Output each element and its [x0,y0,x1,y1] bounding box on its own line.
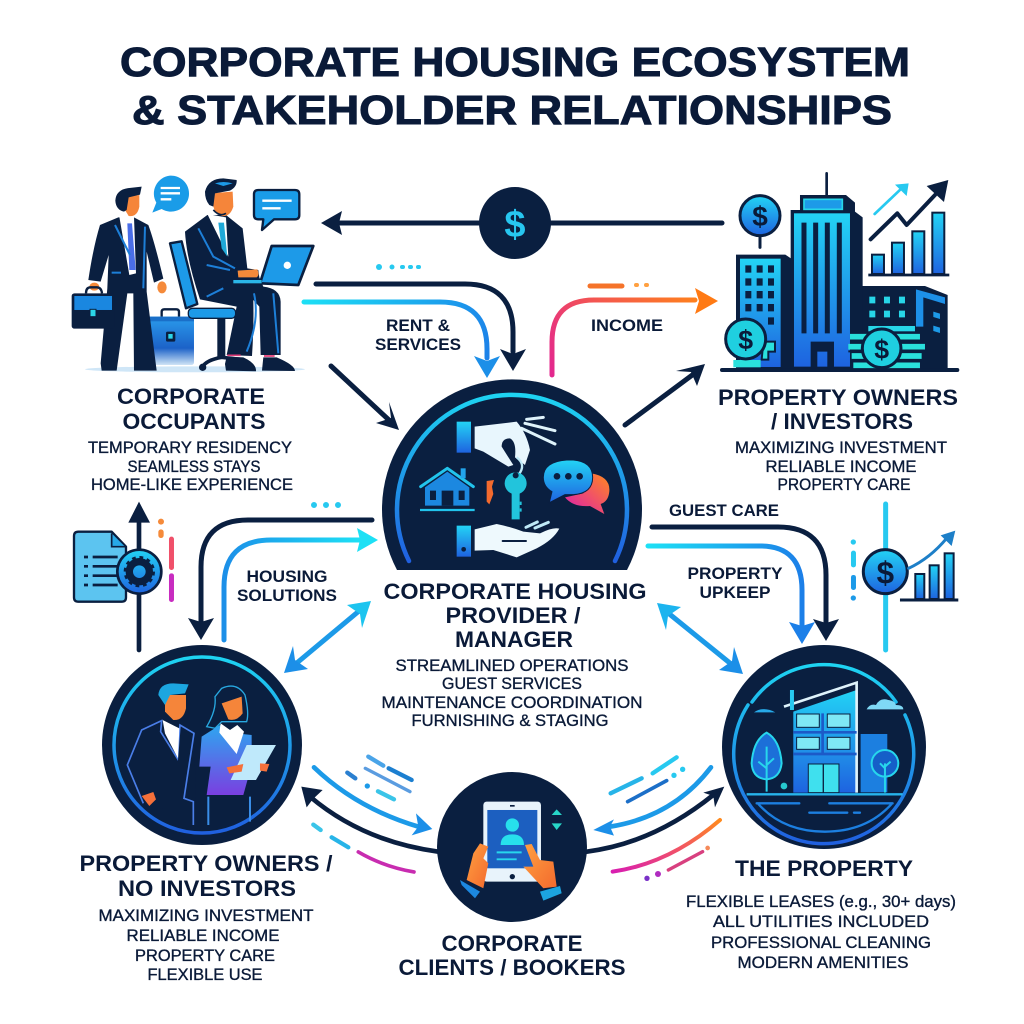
panel: provider dome [382,379,642,570]
icon: dollar coin: $ [504,204,526,246]
heading: corporate clients bookers: CLIENTS / BOOKERS [398,955,626,980]
heading: corporate clients bookers [398,931,626,980]
icon: small orange tag [487,480,494,504]
figure: woman with tablet [199,686,276,825]
icon: trees [752,733,898,793]
heading: corporate housing provider: MANAGER [455,627,573,652]
text: provider services: MAINTENANCE COORDINATION [382,693,642,712]
heading: property owners no investors [80,851,332,901]
text: provider services [382,656,642,730]
heading: corporate occupants: CORPORATE [117,384,265,409]
icon: left building [736,255,793,369]
icon: second briefcase [147,309,194,365]
heading: corporate clients bookers: CORPORATE [442,931,582,956]
icon: document with gear [74,502,174,650]
label: income: INCOME [591,317,663,335]
icon: coin stacks: $ [874,334,889,364]
text: investor benefits [735,438,947,494]
icon: cloud [867,699,903,709]
text: investor benefits: PROPERTY CARE [778,475,910,494]
arrow: occupants to provider [331,366,399,430]
label: rent and services [375,317,461,354]
icon: modern building [781,683,887,793]
heading: corporate housing provider [384,579,646,652]
arrow: income line from investors to occupants [321,187,722,259]
arrow: clients to property flow [587,757,724,881]
heading: property owners investors: PROPERTY OWNERS [718,385,958,410]
label: property upkeep [688,565,782,602]
title [120,39,910,133]
icon: key [505,472,527,519]
text: provider services: FURNISHING & STAGING [412,711,608,730]
icon: coin stacks: $ [738,325,753,355]
icon: dollar with growth chart: $ [877,555,894,590]
label: housing solutions: HOUSING [246,568,328,586]
label: property upkeep: PROPERTY [688,565,782,583]
arrow: provider to owners double-headed [284,601,371,673]
figure: seated man with laptop [185,178,313,371]
label: housing solutions: SOLUTIONS [237,587,337,605]
figure: standing man [72,187,167,371]
icon: chat bubbles [543,460,609,514]
text: provider services: STREAMLINED OPERATIONS [396,656,628,675]
text: owner benefits: PROPERTY CARE [135,946,275,965]
icon: coin stacks [726,319,925,368]
text: investor benefits: RELIABLE INCOME [766,457,916,476]
text: investor benefits: MAXIMIZING INVESTMENT [735,438,947,457]
arrow: rent and services flows [304,264,526,378]
text: owner benefits: MAXIMIZING INVESTMENT [98,906,314,925]
text: occupant benefits [88,438,293,494]
heading: property owners no investors: NO INVESTORS [118,876,296,901]
icon: hanging dollar coin [740,196,780,247]
title: & STAKEHOLDER RELATIONSHIPS [132,87,892,133]
arrow: guest care and upkeep flows [648,527,839,644]
heading: corporate occupants [117,384,266,434]
arrow: owners to clients flow [301,757,438,872]
icon: hands [460,843,562,901]
panel: owners circle [102,645,302,845]
label: property upkeep: UPKEEP [700,584,770,602]
text: occupant benefits: HOME-LIKE EXPERIENCE [91,475,293,494]
panel: clients circle [437,772,587,922]
heading: the property: THE PROPERTY [735,856,913,881]
text: property features: MODERN AMENITIES [738,953,908,972]
text: occupant benefits: SEAMLESS STAYS [128,457,260,476]
icon: upper hand with keys [457,417,555,475]
text: owner benefits [98,906,314,984]
illustration: investors buildings [720,173,959,372]
icon: dollar with growth chart [851,504,958,650]
text: property features: PROFESSIONAL CLEANING [711,933,931,952]
arrow: housing solutions flows [188,505,378,640]
arrow: income flow [552,285,718,375]
text: property features: ALL UTILITIES INCLUDED [713,912,929,931]
icon: right low building [853,286,948,369]
icon: round speech bubble [152,176,189,213]
icon: dollar coin [479,187,551,259]
heading: property owners investors [718,385,958,434]
icon: house [420,468,475,510]
heading: corporate occupants: OCCUPANTS [122,409,266,434]
label: guest care: GUEST CARE [669,502,779,520]
ground and road [747,794,903,832]
text: provider services: GUEST SERVICES [442,674,582,693]
icon: lower open hand [457,522,559,557]
icon: office chair [170,241,240,371]
icon: square speech bubble [254,190,299,230]
text: property features: FLEXIBLE LEASES (e.g., 30+ days) [686,892,956,911]
label: rent and services: RENT & [386,317,450,335]
arrow: provider to property double-headed [657,603,743,674]
panel: property circle [722,645,926,849]
icon: central tower [791,195,863,369]
heading: corporate housing provider: PROVIDER / [446,603,580,628]
figure: man in suit [127,683,196,825]
icon: tablet with person [483,802,562,882]
text: owner benefits: RELIABLE INCOME [126,926,280,945]
heading: property owners investors: / INVESTORS [771,409,913,434]
chart: growth bars with arrows [868,180,949,275]
text: occupant benefits: TEMPORARY RESIDENCY [88,438,292,457]
text: owner benefits: FLEXIBLE USE [148,965,262,984]
illustration: corporate occupants [72,176,313,372]
heading: property owners no investors: PROPERTY OWNERS / [80,851,332,876]
icon: hanging dollar coin: $ [752,201,768,232]
label: rent and services: SERVICES [375,336,461,354]
heading: corporate housing provider: CORPORATE HOUSING [384,579,646,604]
text: property features [686,892,956,972]
label: housing solutions [237,568,337,605]
title: CORPORATE HOUSING ECOSYSTEM [120,39,910,85]
arrow: provider to investors [625,364,705,425]
